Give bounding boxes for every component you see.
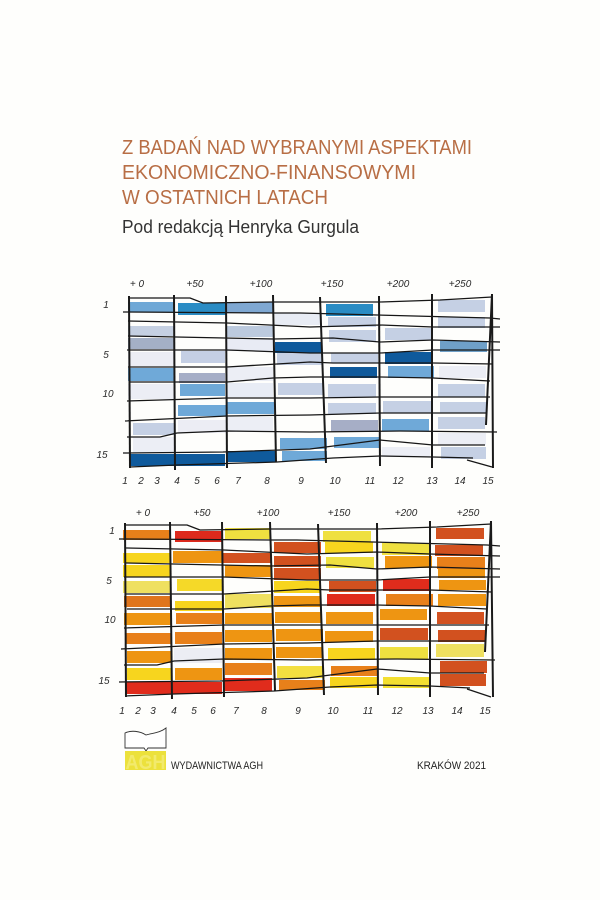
left scale labels — [98, 526, 116, 687]
bottom scale labels: 4 — [171, 706, 177, 717]
top scale labels: +50 — [187, 279, 204, 290]
bottom scale labels: 14 — [451, 706, 463, 717]
bottom scale labels: 11 — [363, 706, 373, 717]
bottom scale labels: 15 — [482, 476, 494, 487]
top scale labels: +200 — [387, 279, 410, 290]
bottom scale labels: 8 — [261, 706, 267, 717]
bottom scale labels: 12 — [391, 706, 403, 717]
bottom scale labels: 13 — [426, 476, 438, 487]
bottom scale labels: 13 — [422, 706, 434, 717]
place and year: KRAKÓW 2021 — [417, 759, 486, 772]
bottom scale labels: 8 — [264, 476, 270, 487]
title: EKONOMICZNO-FINANSOWYMI — [122, 162, 416, 184]
bottom scale labels: 7 — [233, 706, 239, 717]
top scale labels: +100 — [250, 279, 273, 290]
bottom scale labels — [122, 476, 494, 487]
left scale labels: 1 — [109, 526, 115, 537]
bottom scale labels — [119, 706, 491, 717]
left scale labels: 10 — [102, 389, 114, 400]
bottom scale labels: 4 — [174, 476, 180, 487]
bottom scale labels: 11 — [365, 476, 375, 487]
title — [122, 136, 472, 209]
bottom scale labels: 1 — [119, 706, 125, 717]
bottom scale labels: 1 — [122, 476, 128, 487]
top scale labels: +50 — [194, 508, 211, 519]
bottom scale labels: 5 — [191, 706, 197, 717]
bottom scale labels: 10 — [329, 476, 341, 487]
top scale labels: +200 — [395, 508, 418, 519]
top scale labels: +100 — [257, 508, 280, 519]
top scale labels: +150 — [321, 279, 344, 290]
chart: orange sketched table — [98, 508, 500, 717]
left scale labels: 5 — [103, 350, 109, 361]
publisher name: WYDAWNICTWA AGH — [171, 760, 263, 772]
left scale labels — [96, 300, 114, 461]
title: W OSTATNICH LATACH — [122, 187, 328, 209]
top scale labels: + 0 — [130, 279, 145, 290]
left scale labels: 15 — [98, 676, 110, 687]
title: Z BADAŃ NAD WYBRANYMI ASPEKTAMI — [122, 136, 472, 159]
bottom scale labels: 10 — [327, 706, 339, 717]
bottom scale labels: 3 — [154, 476, 160, 487]
bottom scale labels: 7 — [235, 476, 241, 487]
bottom scale labels: 6 — [210, 706, 216, 717]
sketched grid lines — [119, 521, 500, 699]
top scale labels — [136, 508, 480, 519]
left scale labels: 5 — [106, 576, 112, 587]
bottom scale labels: 12 — [392, 476, 404, 487]
top scale labels — [130, 279, 472, 290]
top scale labels: + 0 — [136, 508, 151, 519]
sketched grid lines — [123, 294, 500, 470]
bottom scale labels: 2 — [137, 476, 144, 487]
subtitle: editor: Pod redakcją Henryka Gurgula — [122, 217, 360, 237]
logo letters: AGH — [126, 752, 166, 774]
bottom scale labels: 6 — [214, 476, 220, 487]
top scale labels: +250 — [457, 508, 480, 519]
bottom scale labels: 5 — [194, 476, 200, 487]
left scale labels: 1 — [103, 300, 109, 311]
blue bars — [128, 300, 487, 466]
bottom scale labels: 9 — [295, 706, 301, 717]
left scale labels: 15 — [96, 450, 108, 461]
bottom scale labels: 3 — [150, 706, 156, 717]
bottom scale labels: 14 — [454, 476, 466, 487]
top scale labels: +250 — [449, 279, 472, 290]
orange bars — [123, 528, 487, 694]
bottom scale labels: 9 — [298, 476, 304, 487]
icon: book outline — [125, 728, 166, 751]
logo block — [125, 751, 166, 770]
bottom scale labels: 15 — [479, 706, 491, 717]
top scale labels: +150 — [328, 508, 351, 519]
chart: blue sketched table — [96, 279, 500, 487]
bottom scale labels: 2 — [134, 706, 141, 717]
logo: AGH open book — [125, 728, 166, 774]
left scale labels: 10 — [104, 615, 116, 626]
